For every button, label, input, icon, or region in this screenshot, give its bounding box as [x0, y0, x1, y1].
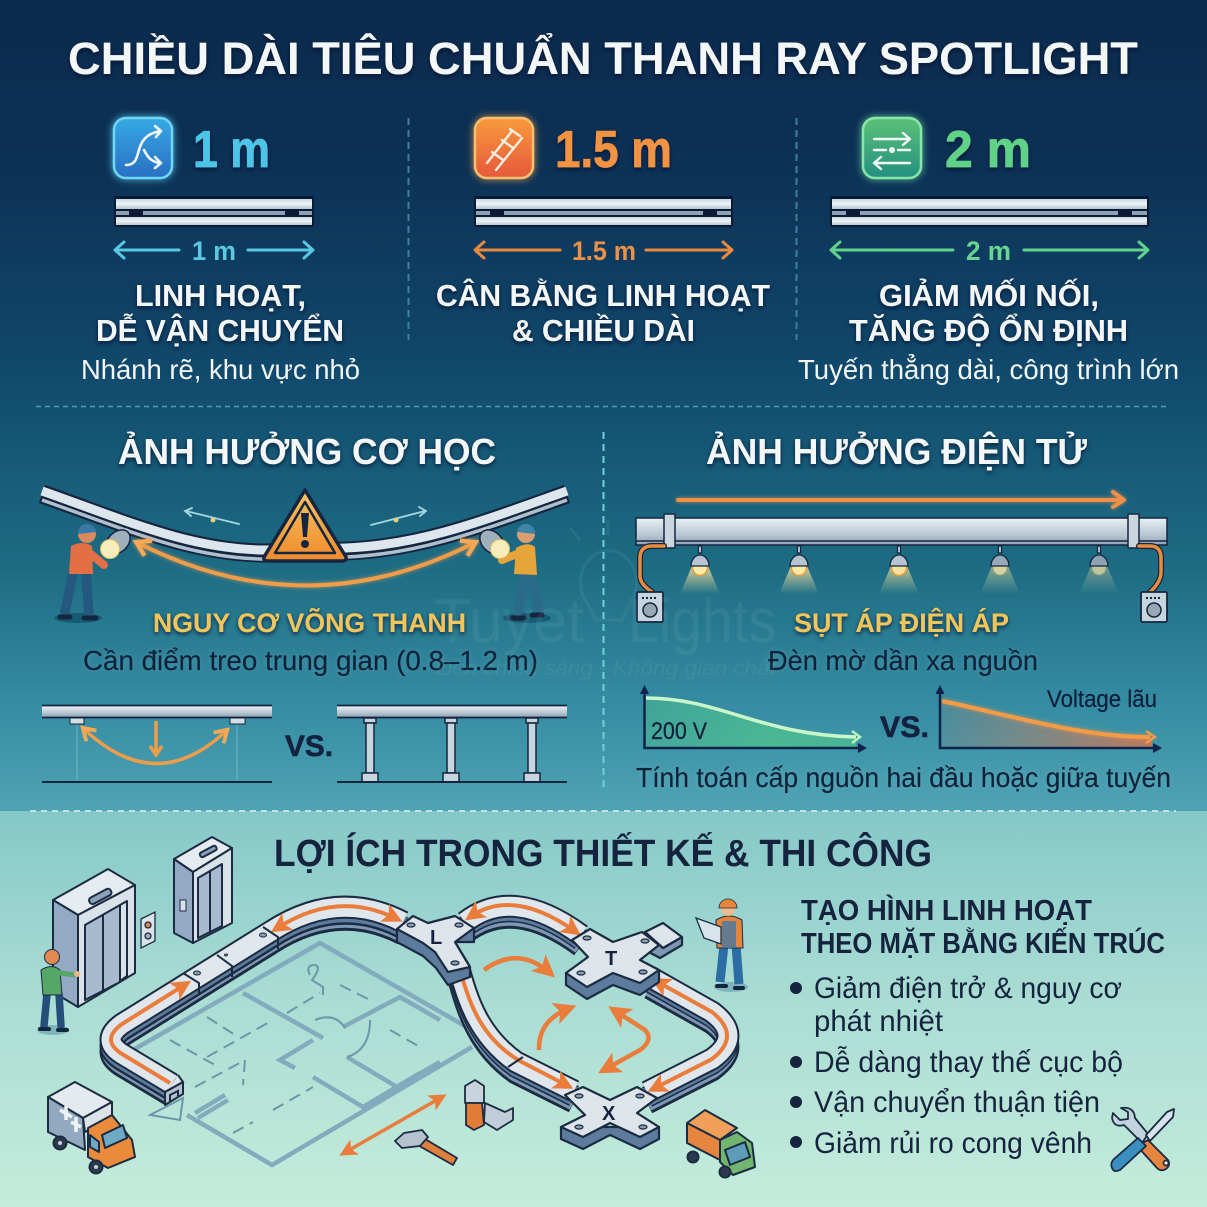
watermark: [434, 520, 777, 680]
power box left: [637, 592, 663, 622]
icon: warning triangle: [264, 490, 346, 561]
heading: linh hoạt: LINH HOẠT,: [135, 278, 306, 313]
track: L to T: [465, 905, 581, 946]
background: dark upper panel: [0, 0, 1207, 811]
track: T to X: [647, 977, 728, 1103]
long rail with brackets: [636, 514, 1167, 548]
heading: ảnh hưởng cơ học: ẢNH HƯỞNG CƠ HỌC: [118, 430, 496, 472]
floor plan: [133, 943, 472, 1165]
junction: X: X: [602, 1103, 616, 1125]
icon: delivery truck green: [687, 1110, 755, 1178]
watermark: Tuyet: [434, 587, 584, 656]
rail network: [111, 905, 728, 1149]
track: L to X: [459, 969, 574, 1102]
heading: linh hoạt: DỄ VẬN CHUYỂN: [96, 312, 344, 348]
heading: ảnh hưởng điện tử: ẢNH HƯỞNG ĐIỆN TỬ: [706, 430, 1087, 472]
subheading: flexible shaping: THEO MẶT BẰNG KIẾN TRÚC: [801, 926, 1165, 960]
dimension arrow: 1.5 m: [475, 236, 732, 266]
description: 2 m: Tuyến thẳng dài, công trình lớn: [798, 353, 1179, 385]
person: engineer with tablet: [696, 899, 748, 992]
diagram: rail with many hangers: [337, 706, 567, 782]
diagram: rail with few hangers: [42, 706, 272, 782]
bullet list: Giảm rủi ro cong vênh: [814, 1127, 1092, 1160]
panel: mechanical impact: [42, 430, 567, 782]
icon: small elevator: [174, 837, 232, 943]
description: power feed calculation: Tính toán cấp nguồn hai đầu hoặc giữa tuyến: [636, 762, 1171, 793]
junction: L: [397, 916, 474, 985]
chart: voltage drop orange: [936, 685, 1162, 753]
description: 1 m: Nhánh rẽ, khu vực nhỏ: [81, 354, 360, 385]
heading: cân bằng: [436, 277, 770, 348]
icon: hammer: [395, 1130, 457, 1165]
heading: cân bằng: CÂN BẰNG LINH HOẠT: [436, 277, 770, 313]
heading: cân bằng: & CHIỀU DÀI: [512, 313, 695, 348]
double arrow over floor plan: [344, 1097, 442, 1153]
icon: flexible branch: [114, 118, 172, 178]
icon: call panel: [141, 912, 155, 948]
junction: L: L: [430, 927, 442, 949]
rail: 1 m: [114, 196, 314, 227]
heading: giảm mối nối: TĂNG ĐỘ ỔN ĐỊNH: [849, 312, 1128, 348]
length value: 1 m: 1 m: [193, 121, 270, 179]
panel: benefits text: [790, 893, 1165, 1160]
title: CHIỀU DÀI TIÊU CHUẨN THANH RAY SPOTLIGHT: [68, 33, 1138, 84]
orange sag arrow: [138, 543, 474, 586]
background: light lower panel: [0, 811, 1207, 1207]
subheading: nguy cơ võng thanh: NGUY CƠ VÕNG THANH: [153, 607, 466, 638]
watermark: Lights: [628, 587, 776, 656]
flow arrows in loop: [484, 958, 649, 1070]
icon: two-way arrows: [863, 118, 921, 178]
person: visitor: [37, 950, 80, 1035]
power cables: [640, 546, 1161, 592]
bullet list: phát nhiệt: [814, 1005, 944, 1038]
rail: 1.5 m: [474, 196, 733, 227]
rail: 2 m: [830, 196, 1149, 227]
chart: voltage drop orange: Voltage lãu: [1047, 686, 1157, 713]
panel: 1.5 m rail: [436, 118, 770, 348]
icon: wrench and screwdriver: [1111, 1108, 1174, 1171]
description: lamps dim: Đèn mờ dần xa nguồn: [768, 645, 1038, 676]
panel: electrical impact: [636, 430, 1171, 793]
dimension arrow: 1 m: 1 m: [192, 236, 236, 266]
bullet list: Giảm điện trở & nguy cơ: [814, 972, 1122, 1005]
bullet list: Vận chuyển thuận tiện: [814, 1086, 1100, 1119]
power box right: [1141, 592, 1167, 622]
small motion arrows: [185, 507, 426, 525]
panel: 2 m rail: [798, 118, 1179, 385]
subheading: sụt áp điện áp: SỤT ÁP ĐIỆN ÁP: [794, 607, 1009, 638]
icon: delivery truck orange: [48, 1082, 135, 1174]
icon: ladder rail: [475, 118, 533, 178]
icon: connector part: [465, 1080, 513, 1130]
bullet list: Dễ dàng thay thế cục bộ: [814, 1046, 1123, 1079]
dimension arrow: 1 m: [115, 236, 313, 266]
junction: X: [561, 1087, 659, 1149]
junction: T: [566, 923, 682, 999]
bullet list: [790, 972, 1123, 1160]
description: suspension points: Cần điểm treo trung gian (0.8–1.2 m): [83, 645, 538, 676]
dimension arrow: 2 m: 2 m: [966, 236, 1011, 266]
icon: big elevator: [53, 869, 135, 1007]
heading: linh hoạt: [96, 278, 344, 348]
illustration: sagging rail: [42, 491, 567, 559]
person: worker left: [54, 524, 135, 623]
heading: benefits: LỢI ÍCH TRONG THIẾT KẾ & THI CÔNG: [274, 830, 932, 875]
orange current arrow: [678, 492, 1124, 507]
dimension arrow: 1.5 m: 1.5 m: [572, 236, 636, 266]
dimension arrow: 2 m: [831, 236, 1148, 266]
chart: voltage drop green: [640, 685, 867, 753]
heading: giảm mối nối: [849, 277, 1128, 348]
lamps dimming along the rail: [680, 546, 1119, 594]
heading: giảm mối nối: GIẢM MỐI NỐI,: [879, 277, 1099, 313]
length value: 1.5 m: 1.5 m: [555, 121, 672, 179]
panel: 1 m rail: [81, 118, 360, 385]
junction: T: T: [605, 948, 617, 970]
track: long left run: [111, 906, 403, 1105]
chart: voltage drop green: 200 V: [651, 718, 707, 745]
subheading: flexible shaping: [801, 893, 1165, 960]
label: vs. left: VS.: [285, 730, 333, 763]
watermark: Đèn chiếu sáng - Không gian chất: [436, 657, 777, 680]
length value: 2 m: 2 m: [945, 121, 1031, 179]
person: worker right: [475, 524, 551, 623]
subheading: flexible shaping: TẠO HÌNH LINH HOẠT: [801, 893, 1092, 927]
label: vs. right: VS.: [880, 711, 929, 744]
